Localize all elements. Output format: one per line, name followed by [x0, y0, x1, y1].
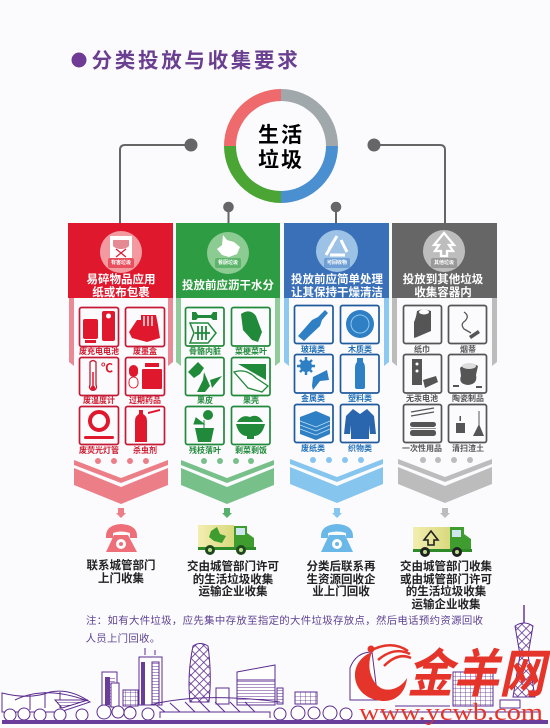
- dots: [201, 458, 254, 464]
- labels: hazardous items: 废温度计: [83, 395, 115, 405]
- labels: other items: 陶瓷制品: [452, 393, 484, 403]
- low buildings: [216, 665, 317, 705]
- text: gray collection: 或由城管部门许可: [400, 572, 492, 586]
- labels: other items: 无汞电池: [406, 393, 438, 403]
- header: red: 纸或布包裹: [92, 285, 150, 299]
- arrow: blue: [332, 508, 342, 518]
- labels: hazardous items: 杀虫剂: [133, 445, 157, 455]
- labels: recyclable items: [301, 344, 372, 453]
- dots: [420, 457, 473, 463]
- text: gray collection: 运输企业收集: [412, 597, 481, 611]
- header: green: 投放前应沥干水分: [182, 278, 274, 292]
- text: gray collection: [400, 559, 492, 611]
- text: green collection: [187, 559, 279, 598]
- icon: blue telephone: [321, 524, 353, 552]
- icons: recyclable items: [294, 306, 379, 442]
- chevron: [181, 460, 274, 504]
- bridge and bushes: [4, 698, 352, 721]
- labels: hazardous items: 废充电电池: [79, 346, 119, 356]
- header: red: 易碎物品应用: [86, 272, 156, 286]
- icon: red telephone: [106, 524, 137, 552]
- chevron: [290, 459, 383, 503]
- title: 分类投放与收集要求: [92, 50, 300, 72]
- labels: other items: 一次性用品: [402, 443, 442, 453]
- crescent: [355, 652, 407, 701]
- labels: food items: 菜梗菜叶: [235, 346, 267, 356]
- donut: 生活垃圾: [224, 89, 338, 203]
- lattice tower: [189, 644, 210, 702]
- labels: hazardous items: 过期药品: [129, 395, 161, 405]
- side ribbons: [284, 298, 389, 366]
- text: blue collection: 分类后联系再: [306, 559, 376, 573]
- arrow: green: [222, 508, 232, 518]
- header: blue: 投放前应简单处理: [291, 272, 383, 286]
- labels: hazardous items: [79, 346, 161, 455]
- header: green: [176, 223, 280, 298]
- note: 注：如有大件垃圾，应先集中存放至指定的大件垃圾存放点，然后电话预约资源回收: [86, 614, 484, 627]
- text: red collection: [86, 558, 156, 585]
- side ribbons: [392, 298, 497, 366]
- icon: green truck: [198, 525, 256, 555]
- labels: food items: [189, 346, 267, 455]
- labels: recyclable items: 木质类: [348, 344, 372, 354]
- note: 人员上门回收。: [86, 632, 160, 645]
- logo: ycwb: [355, 645, 550, 726]
- side ribbons: [69, 298, 173, 366]
- dots: [95, 458, 149, 464]
- connector: centre right: [331, 202, 341, 223]
- header: red: [68, 223, 173, 299]
- towers: [102, 648, 162, 707]
- header: gray: 收集容器内: [414, 285, 472, 299]
- donut: 生活垃圾: 生活: [258, 124, 304, 147]
- text: red collection: 联系城管部门: [86, 558, 156, 572]
- chevron: [398, 459, 492, 503]
- labels: food items: 剩菜剩饭: [235, 445, 267, 455]
- icon: gray truck: [413, 527, 472, 557]
- text: green collection: 交由城管部门许可: [187, 559, 279, 573]
- labels: food items: 果壳: [243, 395, 259, 405]
- icons: food items: [186, 308, 270, 444]
- header: green: 餐厨垃圾: [218, 259, 238, 266]
- labels: recyclable items: 玻璃类: [301, 344, 325, 354]
- panel: recyclables: [284, 223, 389, 503]
- dome and grid building: [350, 652, 540, 712]
- text: gray collection: 交由城管部门收集: [400, 559, 492, 573]
- text: blue collection: 生资源回收企: [306, 572, 376, 586]
- connector: right: [368, 138, 445, 223]
- text: blue collection: [306, 559, 376, 598]
- text: green collection: 运输企业收集: [198, 584, 268, 598]
- note: [86, 614, 484, 645]
- panel: hazardous waste: [68, 223, 173, 504]
- text: green collection: 的生活垃圾收集: [193, 572, 274, 586]
- text: blue collection: 业上门回收: [312, 584, 370, 598]
- icons: hazardous items: [80, 308, 164, 444]
- labels: hazardous items: 废荧光灯管: [79, 445, 119, 455]
- labels: recyclable items: 织物类: [348, 443, 372, 453]
- arrow: gray: [440, 508, 450, 518]
- header: gray: 投放到其他垃圾: [403, 272, 484, 286]
- labels: other items: 清扫渣土: [452, 443, 484, 453]
- labels: other items: 纸巾: [414, 344, 430, 354]
- icons: other items: [404, 306, 486, 442]
- text: red collection: 上门收集: [98, 571, 144, 585]
- panel: food waste: [176, 223, 280, 504]
- labels: food items: 残枝落叶: [189, 445, 221, 455]
- arrow: red: [116, 508, 126, 518]
- header: gray: [392, 223, 497, 299]
- header: gray: 其他垃圾: [434, 259, 454, 266]
- ground band: [2, 720, 548, 724]
- labels: recyclable items: 金属类: [301, 393, 325, 403]
- labels: recyclable items: 塑料类: [348, 393, 372, 403]
- header: blue: [284, 223, 389, 299]
- header: red: 有害垃圾: [111, 259, 131, 266]
- labels: other items: [402, 344, 484, 453]
- skyline: [2, 605, 540, 721]
- header: blue: 可回收物: [327, 259, 347, 266]
- logo url: www.ycwb.com: [359, 700, 543, 726]
- labels: hazardous items: 废墨盒: [133, 346, 157, 356]
- labels: recyclable items: 废纸类: [301, 443, 325, 453]
- labels: food items: 骨骼内脏: [189, 346, 221, 356]
- connector: left: [120, 138, 198, 223]
- text: gray collection: 的生活垃圾收集: [406, 584, 487, 598]
- panel: other waste: [392, 223, 497, 503]
- connector: centre left: [223, 202, 234, 223]
- labels: other items: 烟蒂: [460, 344, 476, 354]
- dots: [310, 457, 364, 463]
- labels: food items: 果皮: [197, 395, 213, 405]
- header: blue: 让其保持干燥清洁: [291, 285, 383, 299]
- stadium: [2, 691, 90, 712]
- side ribbons: [176, 298, 280, 366]
- icons: hazardous items: ℃: [101, 361, 113, 375]
- canton tower: [513, 605, 535, 697]
- donut: 生活垃圾: 垃圾: [258, 148, 304, 172]
- chevron: [74, 460, 168, 504]
